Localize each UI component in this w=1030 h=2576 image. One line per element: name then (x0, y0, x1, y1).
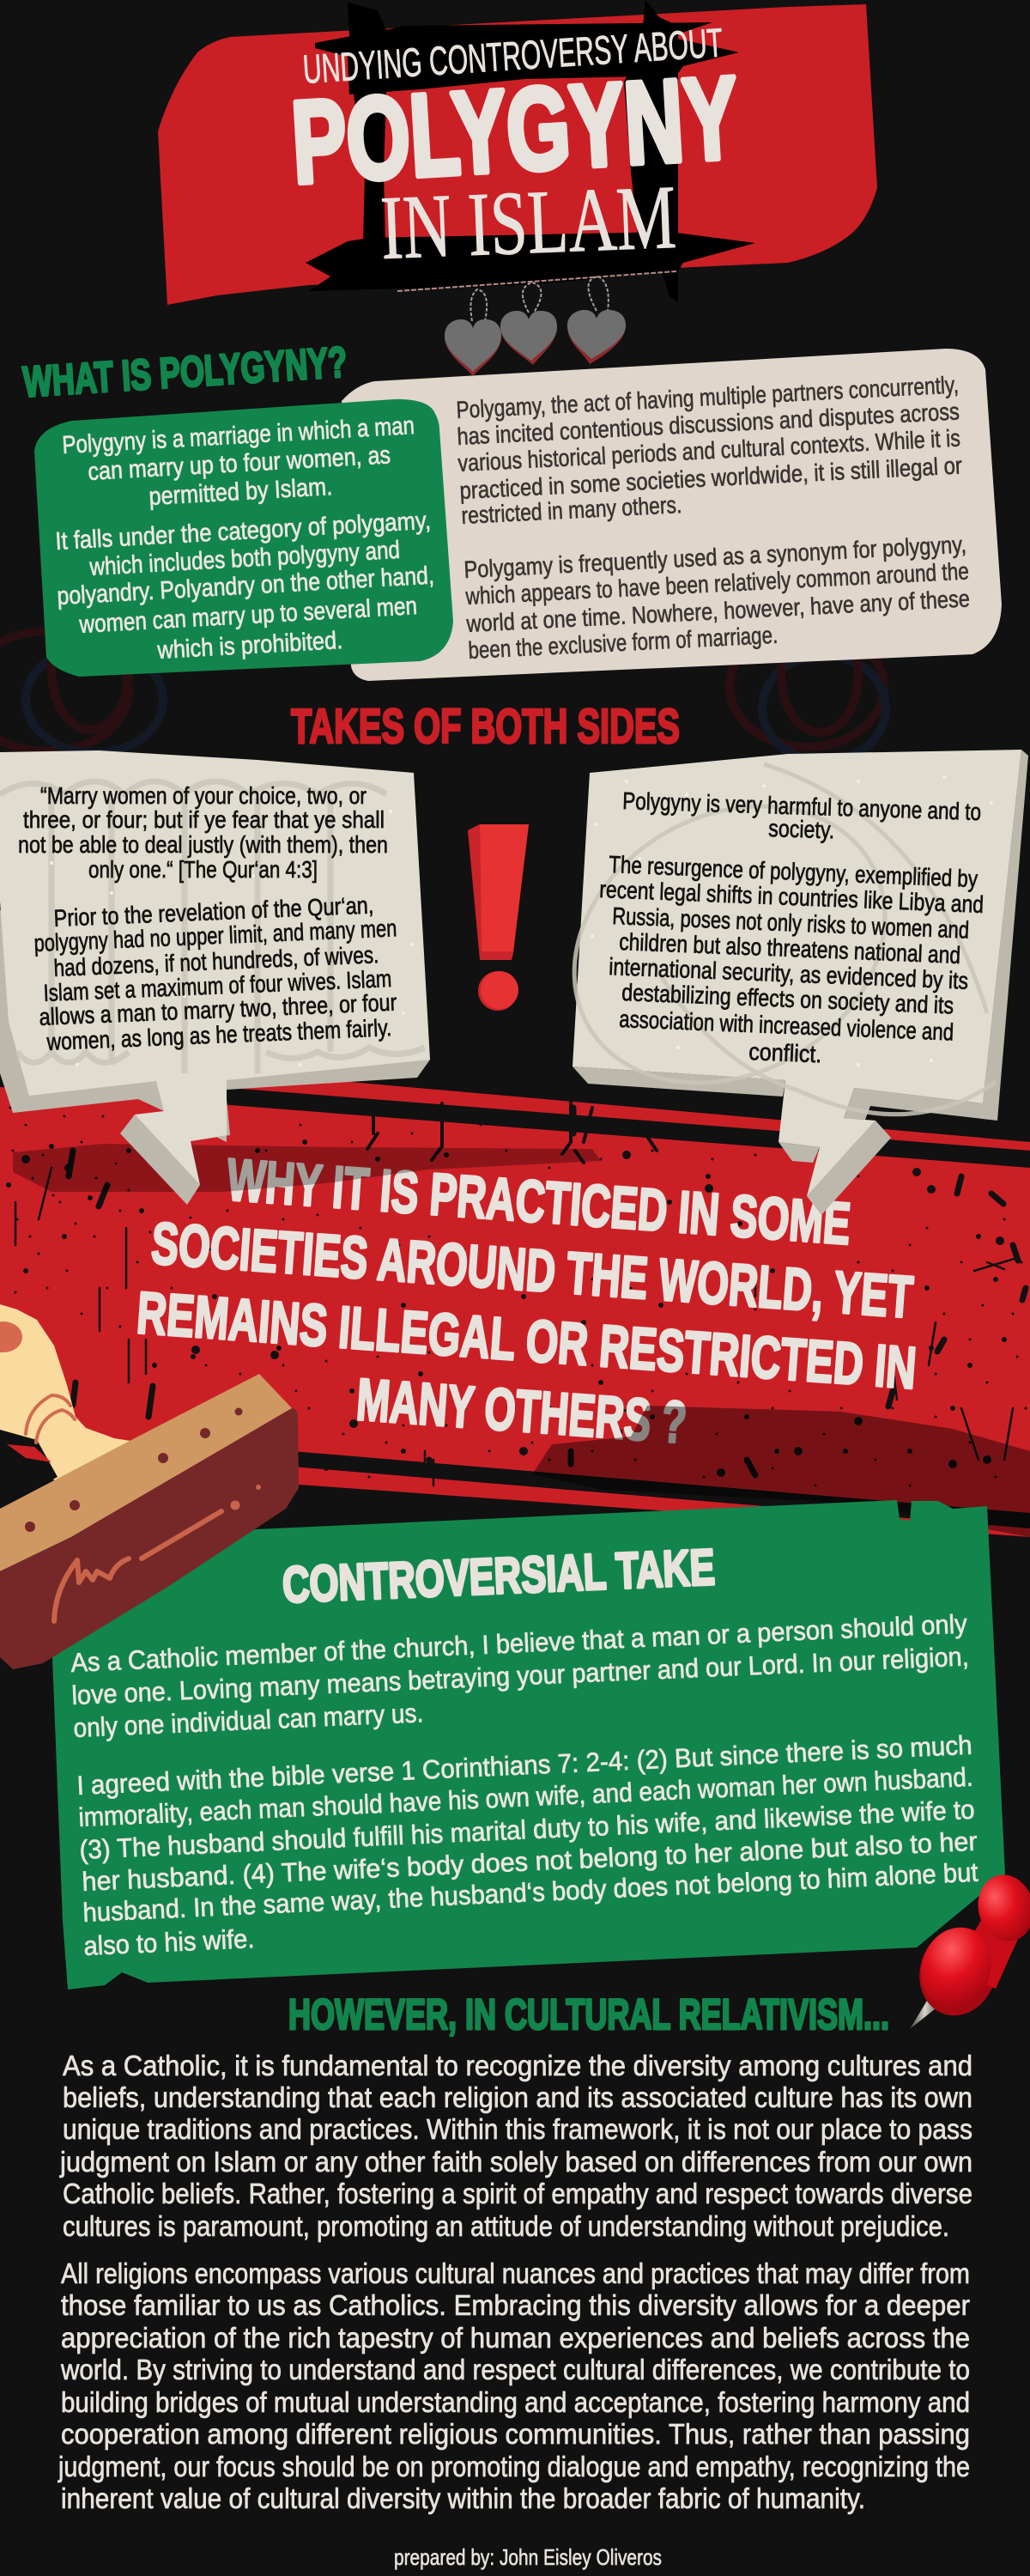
text block: paragraph one: As a Catholic, it is fundamental to recognize the diversity among cultures and (63, 2050, 972, 2081)
speech bubble: against side: association with increased violence and (619, 1005, 954, 1046)
speech bubble: pro side: not be able to deal justly (with them), then (18, 831, 388, 858)
ring watermark (524, 751, 996, 1138)
heading: what is polygyny: WHAT IS POLYGYNY? (21, 337, 348, 406)
text block: paragraph two (58, 2257, 970, 2514)
speech bubble: against side: society. (768, 815, 835, 843)
panel: polygamy explanation (342, 349, 1002, 681)
lace watermark (0, 781, 425, 1073)
heading: controversial take: CONTROVERSIAL TAKE (282, 1539, 716, 1613)
speech bubble: against side: destabilizing effects on society and its (621, 979, 954, 1019)
panel: controversial take (52, 1500, 1005, 1990)
text block: paragraph one: beliefs, understanding that each religion and its associated culture has its own (63, 2081, 972, 2113)
text block: paragraph two: inherent value of cultural diversity within the broader fabric of humanity. (61, 2482, 865, 2514)
text block: paragraph two: appreciation of the rich tapestry of human experiences and beliefs across the (61, 2322, 970, 2354)
panel: controversial take: (3) The husband should fulfill his marital duty to his wife, and likewise the wife to (79, 1795, 975, 1865)
text block: paragraph two: cooperation among different religious communities. Thus, rather than passing (61, 2418, 970, 2450)
big question: MANY OTHERS ? (354, 1366, 688, 1455)
icon: heart one (445, 319, 501, 376)
string and hearts (397, 271, 676, 376)
footer credit: prepared by: John Eisley Oliveros (394, 2544, 662, 2570)
icon: push pin (908, 1868, 1030, 2029)
speech bubble: pro side: only one.“ [The Qur‘an 4:3] (88, 856, 318, 883)
icon: heart three (567, 310, 626, 364)
big question (13, 1144, 1030, 1537)
panel: polygyny definition: permitted by Islam. (148, 473, 333, 511)
bubble face and shadow (0, 910, 430, 1142)
panel: controversial take: her husband. (4) The wife‘s body does not belong to her alone but also to her (82, 1826, 978, 1897)
speech bubble: pro side: women, as long as he treats them fairly. (45, 1014, 392, 1055)
red grunge background band (0, 1051, 1030, 1537)
specks (52, 794, 412, 1065)
heading line one: UNDYING CONTROVERSY ABOUT (301, 19, 724, 92)
heading: takes of both sides: TAKES OF BOTH SIDES (291, 699, 680, 754)
icon: heart two (500, 311, 557, 365)
red brush banner (158, 4, 877, 305)
speech bubble: pro side: allows a man to marry two, three, or four (39, 989, 397, 1030)
background knot left (0, 610, 163, 753)
title banner (158, 0, 877, 305)
icon: exclamation mark (468, 824, 529, 1011)
splatter (9, 1091, 1026, 1485)
panel: controversial take: also to his wife. (83, 1923, 255, 1961)
panel: polygamy explanation: been the exclusive form of marriage. (468, 622, 779, 664)
quote text: “Marry women of your choice, two, or (40, 782, 367, 809)
panel: polygamy explanation: restricted in many others. (461, 491, 682, 529)
speech bubble: against side (524, 750, 1028, 1215)
heading in islam: IN ISLAM (379, 167, 678, 278)
speech bubble: pro side: three, or four; but if ye fear that ye shall (23, 806, 385, 833)
black brush strokes (306, 0, 755, 302)
panel: controversial take: love one. Loving many means betraying your partner and our Lord. In our religion, (71, 1641, 969, 1710)
panel: polygyny definition: which includes both polygyny and (88, 537, 401, 581)
icon: rubber stamp (0, 1304, 299, 1669)
speech bubble: pro side (0, 750, 430, 1205)
speech bubble: pro side: Islam set a maximum of four wives. Islam (43, 965, 392, 1006)
panel: polygyny definition: can marry up to four women, as (88, 441, 391, 486)
background knot right (730, 616, 886, 762)
panel: controversial take: As a Catholic member of the church, I believe that a man or a person should only (70, 1608, 968, 1678)
panel: polygyny definition: women can marry up to several men (78, 592, 418, 639)
panel: controversial take: husband. In the same way, the husband‘s body does not belong to him alone but (82, 1857, 979, 1928)
history text: Prior to the revelation of the Qur‘an, (53, 891, 374, 932)
speech bubble: pro side: had dozens, if not hundreds, of wives. (53, 941, 379, 981)
panel: controversial take: only one individual can marry us. (73, 1698, 424, 1743)
speech bubble: pro side: polygyny had no upper limit, and many men (33, 914, 397, 957)
panel: polygyny definition: which is prohibited. (156, 627, 343, 665)
panel: polygyny definition: Polygyny is a marriage in which a man (62, 412, 415, 459)
text block: paragraph two: those familiar to us as Catholics. Embracing this diversity allows for a deeper (61, 2289, 970, 2321)
panel: controversial take: I agreed with the bible verse 1 Corinthians 7: 2-4: (2) But since there is so much (76, 1730, 972, 1801)
speech bubble: against side: children but also threatens national and (619, 928, 961, 969)
text block: paragraph one: judgment on Islam or any other faith solely based on differences from our own (59, 2146, 972, 2178)
speech bubble: against side: conflict. (748, 1038, 822, 1067)
specks (592, 777, 991, 1065)
panel: polygyny definition: It falls under the category of polygamy, (55, 507, 432, 556)
heading polygyny: POLYGYNY (288, 52, 742, 208)
brush overlays (13, 1144, 601, 1192)
panel: polygyny definition (34, 399, 453, 677)
text block: paragraph one (59, 2050, 972, 2242)
panel: polygyny definition: polyandry. Polyandry on the other hand, (57, 562, 435, 611)
bubble face and shadow (573, 750, 1028, 1121)
